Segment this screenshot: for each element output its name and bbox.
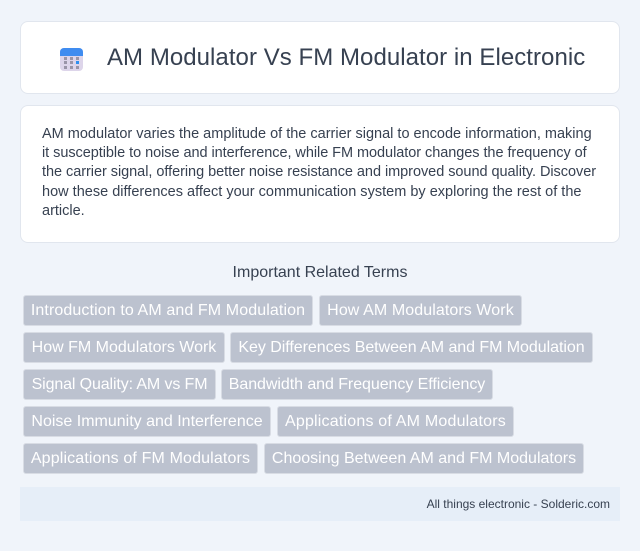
text block: intro [42, 126, 596, 219]
text block: intro: AM modulator varies the amplitude of the carrier signal to encode information, making [42, 126, 592, 142]
tag: Introduction to AM and FM Modulation [31, 302, 305, 319]
tag: How AM Modulators Work [327, 302, 514, 319]
panel: title card [20, 21, 620, 94]
tag [319, 295, 522, 326]
tag [264, 443, 584, 474]
text block: intro: it susceptible to noise and interference, while FM modulator changes the frequency of [42, 145, 587, 161]
footer credit: All things electronic - Solderic.com [427, 497, 610, 511]
heading: related terms: Important Related Terms [233, 264, 407, 281]
panel: intro text [20, 105, 620, 243]
tag: Applications of AM Modulators [285, 413, 506, 430]
tag: How FM Modulators Work [32, 339, 216, 356]
tag: Choosing Between AM and FM Modulators [272, 450, 576, 467]
tag [230, 332, 593, 363]
tag: Bandwidth and Frequency Efficiency [229, 376, 485, 393]
tag [23, 332, 225, 363]
tag: Signal Quality: AM vs FM [32, 376, 207, 393]
text block: intro: the carrier signal, offering better noise resistance and improved sound quality. Discover [42, 164, 596, 180]
text block: intro: article. [42, 203, 85, 219]
tag list [23, 295, 593, 474]
tag [23, 443, 258, 474]
footer bar [20, 487, 620, 521]
tag [23, 406, 271, 437]
tag [221, 369, 493, 400]
tag [277, 406, 514, 437]
icon: calendar [60, 48, 83, 71]
tag: Noise Immunity and Interference [31, 413, 263, 430]
text block: intro: how these differences affect your communication system by exploring the rest of the [42, 184, 582, 200]
tag: Key Differences Between AM and FM Modulation [238, 339, 585, 356]
title: AM Modulator Vs FM Modulator in Electronic [107, 44, 585, 71]
tag [23, 369, 216, 400]
tag [23, 295, 313, 326]
tag: Applications of FM Modulators [31, 450, 250, 467]
